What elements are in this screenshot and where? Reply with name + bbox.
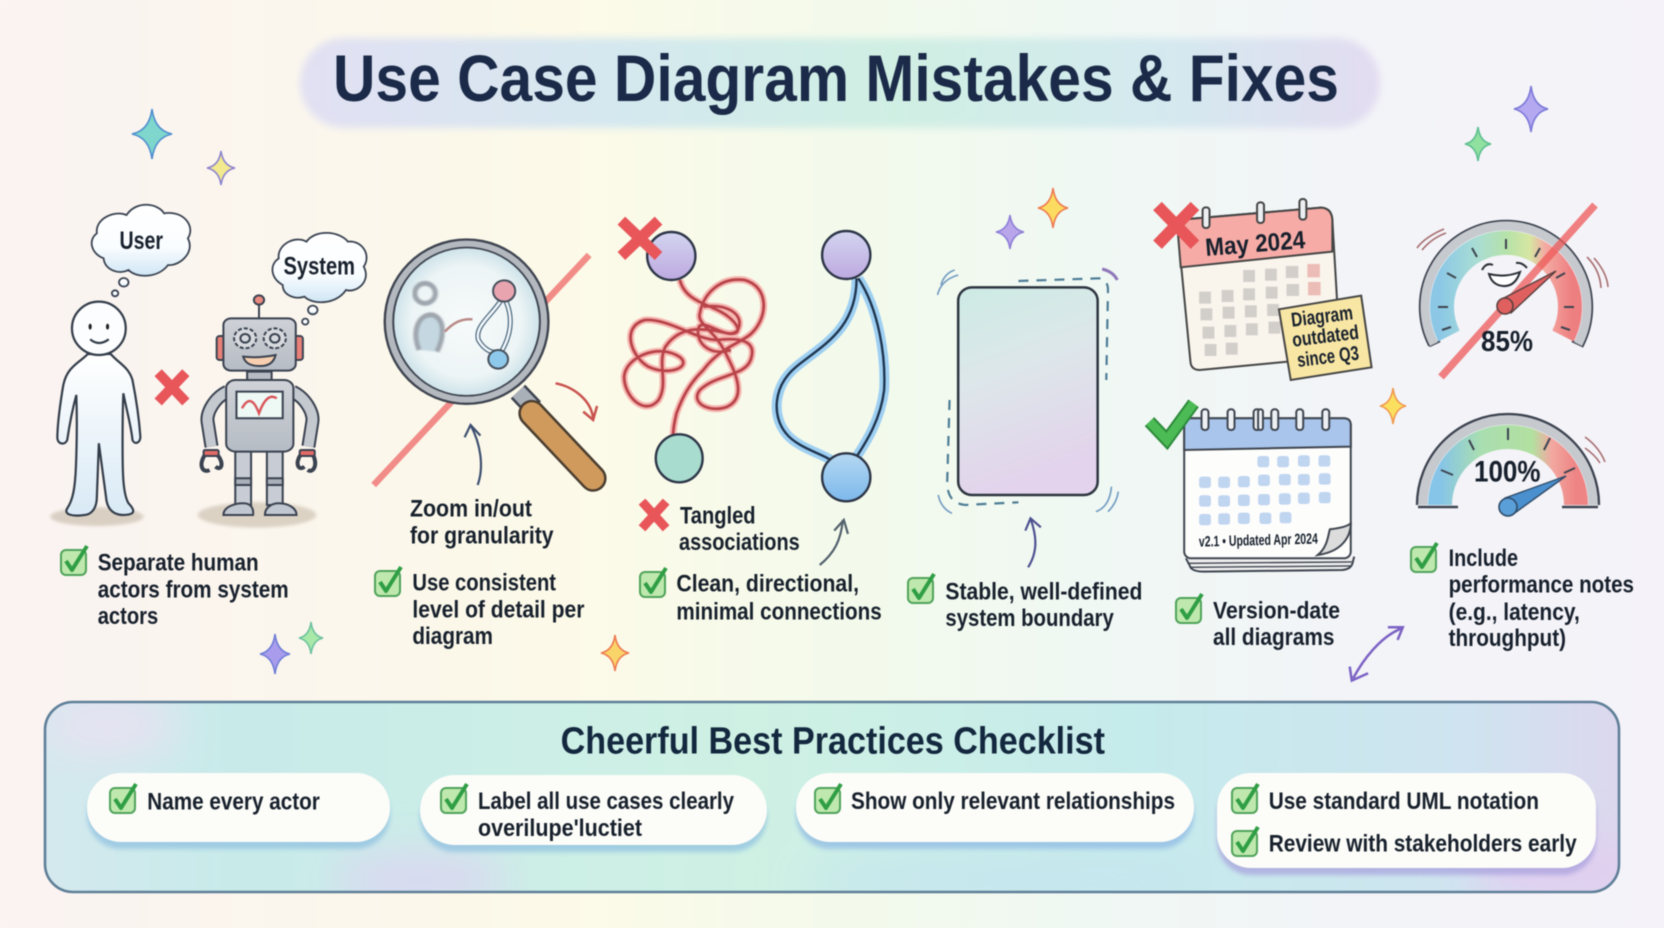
vibration marks (1417, 229, 1608, 288)
text: boundary: Stable, well-defined (945, 578, 1142, 605)
text: sticky note: Diagram (1290, 302, 1354, 332)
text: version stamp: v2.1 • Updated Apr 2024 (1199, 531, 1319, 551)
wiggle marks (938, 270, 1118, 513)
dashed boundary (947, 278, 1108, 505)
user thought cloud (92, 205, 190, 296)
text: boundary (945, 578, 1142, 632)
text: version-date: all diagrams (1213, 624, 1334, 651)
text: performance notes: Include (1449, 545, 1518, 572)
pill: uml and stakeholders: Use standard UML notation (1269, 788, 1539, 815)
robot shadow (198, 502, 316, 528)
text: separate actors (98, 550, 289, 630)
text: performance notes: throughput) (1449, 625, 1566, 652)
text: sticky note: since Q3 (1296, 343, 1360, 372)
pill: label all use cases (420, 775, 767, 852)
text: May 2024: May 2024 (1204, 226, 1306, 262)
text: tangled (679, 502, 800, 556)
icon: red x between actors (158, 373, 186, 402)
text: zoom in/out (410, 496, 554, 549)
icon: red x on calendar (1157, 206, 1195, 245)
section: calendars (1149, 199, 1403, 681)
text: actor labels: User (120, 227, 163, 255)
pill: relevant relationships: Show only relevant relationships (851, 788, 1175, 815)
tangled lines (624, 280, 764, 437)
vibration marks (1585, 437, 1605, 463)
text: actor labels: System (284, 252, 355, 280)
text: consistent detail: Use consistent (412, 570, 556, 597)
robot (202, 295, 315, 515)
system thought cloud (272, 233, 367, 325)
section: tangled vs clean associations and boundary (621, 221, 1118, 567)
arrow: to clean node (820, 520, 848, 565)
text: consistent detail: diagram (412, 623, 493, 650)
human figure (57, 302, 140, 516)
section: separate actors illustration (50, 205, 597, 528)
gauge: 85% (1417, 205, 1608, 377)
pill: relevant relationships (796, 773, 1194, 849)
node: purple tangled (647, 232, 695, 280)
icon: small red x (642, 502, 666, 528)
panel: best practices checklist (40, 695, 1650, 906)
icon: check, performance (1411, 543, 1437, 572)
outdated calendar (1177, 199, 1340, 370)
text: performance notes: performance notes (1449, 572, 1634, 599)
text: clean: Clean, directional, (676, 571, 859, 598)
text: clean (676, 571, 882, 625)
icon: green check on calendar (1149, 403, 1194, 440)
icon: check, consistent detail (375, 567, 401, 596)
text: separate actors: Separate human (98, 550, 259, 577)
node: blue clean (822, 453, 870, 501)
text: consistent detail (412, 570, 584, 650)
pill: label all use cases: Label all use cases clearly (478, 788, 735, 815)
text: version-date: Version-date (1213, 597, 1340, 624)
text: sticky note (1290, 302, 1360, 372)
icon: check, boundary (908, 574, 934, 603)
icon: check, clean (640, 568, 666, 597)
text: separate actors: actors from system (98, 576, 289, 603)
needle (1505, 476, 1566, 515)
icon: check, separate actors (61, 546, 87, 575)
title: Use Case Diagram Mistakes & Fixes (333, 41, 1339, 115)
pill: label all use cases: overilupe'luctiet (478, 815, 642, 842)
red slash behind magnifier (374, 255, 589, 485)
text: separate actors: actors (98, 603, 158, 630)
arrow: purple double (1350, 627, 1403, 681)
current calendar (1184, 409, 1354, 572)
gauge: 100% (1417, 414, 1605, 516)
pill: uml and stakeholders: Review with stakeholders early (1269, 831, 1577, 858)
text: boundary: system boundary (945, 605, 1114, 632)
node: green tangled (656, 434, 703, 482)
icon: red x on tangle (621, 221, 659, 256)
needle (1500, 271, 1556, 313)
text: performance notes: (e.g., latency, (1449, 599, 1580, 626)
pill: name every actor: Name every actor (147, 788, 320, 815)
arrow: blue up (465, 425, 481, 485)
text: zoom in/out: Zoom in/out (410, 496, 532, 523)
text: 100%: 100% (1474, 456, 1540, 489)
text: zoom in/out: for granularity (410, 522, 554, 549)
text: tangled: Tangled (680, 502, 756, 529)
text: tangled: associations (679, 529, 800, 556)
arrow: red curved (556, 383, 597, 420)
text: version-date (1213, 597, 1340, 651)
text: 85%: 85% (1481, 326, 1533, 358)
magnifier (384, 238, 593, 478)
pill: uml and stakeholders (1217, 773, 1596, 875)
text: sticky note: outdated (1291, 322, 1360, 352)
clean connections (777, 278, 884, 460)
pill: name every actor (87, 773, 390, 849)
arrow: to boundary (1025, 518, 1041, 567)
title banner (300, 38, 1380, 128)
sparkles (132, 86, 1548, 674)
text: consistent detail: level of detail per (412, 596, 584, 623)
text: clean: minimal connections (676, 598, 882, 625)
text: performance notes (1449, 545, 1634, 652)
system boundary box (958, 287, 1098, 495)
user shadow (50, 507, 144, 526)
heading: checklist: Cheerful Best Practices Checklist (561, 720, 1105, 762)
red slash (1441, 205, 1595, 377)
node: purple clean (822, 231, 870, 279)
icon: check, version-date (1176, 594, 1202, 623)
text: actor labels (120, 227, 355, 280)
sticky note (1279, 296, 1372, 380)
